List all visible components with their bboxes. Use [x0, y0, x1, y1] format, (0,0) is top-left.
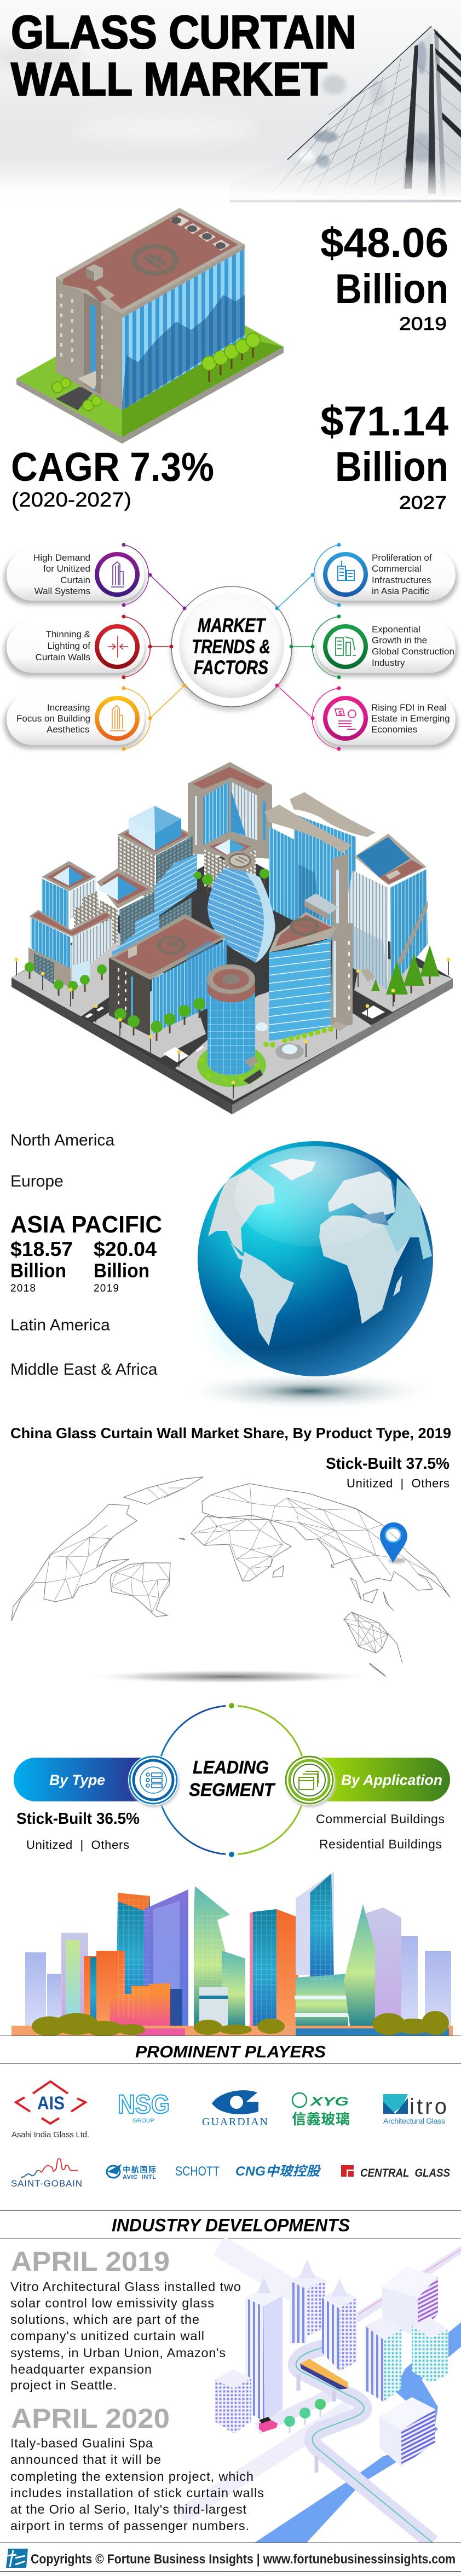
regional list: Latin America — [10, 1316, 110, 1334]
by application pill: By Application — [341, 1772, 442, 1788]
logo: NSG: GROUP — [132, 2118, 154, 2124]
logo: Vitro — [383, 2094, 447, 2125]
factor: exponential growth: Global Construction — [372, 647, 454, 656]
central circle: FACTORS — [194, 657, 268, 678]
mid glass building — [97, 868, 159, 968]
application breakdown — [316, 1812, 445, 1851]
market size 2019 — [320, 220, 448, 334]
asia pacific stats — [10, 1211, 162, 1294]
asia pacific stats: $20.04 — [94, 1238, 157, 1260]
leading segment label: SEGMENT — [189, 1780, 276, 1800]
asia pacific stats: 2019 — [94, 1283, 119, 1294]
development: April 2020: completing the extension project, which — [10, 2469, 253, 2484]
logo: AIS: Asahi India Glass Ltd. — [11, 2130, 89, 2139]
market size 2027: Billion — [335, 444, 448, 490]
front right curved tower — [269, 893, 353, 1041]
development: April 2019: Vitro Architectural Glass installed two — [10, 2280, 241, 2294]
factor: proliferation — [275, 543, 458, 610]
title: WALL MARKET — [11, 54, 327, 106]
factor: aesthetics: Focus on Building — [16, 713, 90, 724]
map shadow — [84, 1670, 374, 1684]
illustration: isometric city — [11, 762, 453, 1114]
regional list — [10, 1131, 162, 1379]
logo: XYG: XYG — [309, 2095, 349, 2108]
footer — [0, 2543, 461, 2571]
development: April 2019: company's unitized curtain wall — [10, 2329, 204, 2343]
by application pill — [284, 1755, 450, 1807]
icon: fortune business insights logo — [6, 2549, 28, 2568]
panel: leading segment — [14, 1701, 450, 1859]
development: April 2020: announced that it will be — [10, 2452, 161, 2467]
logo: NSG: NSG — [118, 2090, 170, 2119]
front left helipad building — [109, 914, 227, 1036]
illustration: isometric helipad building — [16, 208, 284, 444]
logo: Saint-Gobain — [11, 2159, 82, 2189]
heading: prominent players: PROMINENT PLAYERS — [135, 2042, 326, 2061]
leading segment label — [189, 1757, 276, 1800]
egg tower — [208, 851, 275, 963]
development: April 2020: APRIL 2020 — [11, 2403, 170, 2434]
CAGR: CAGR 7.3% — [11, 444, 214, 490]
asia pacific stats: ASIA PACIFIC — [10, 1211, 162, 1238]
application breakdown: Commercial Buildings — [316, 1812, 445, 1826]
factor: exponential growth: Industry — [372, 658, 405, 668]
trees, lamps and fountains — [14, 869, 450, 1098]
panel: market trends and factors — [4, 543, 458, 751]
logo: Schott: SCHOTT — [175, 2164, 220, 2179]
factor: aesthetics: Increasing — [47, 702, 90, 713]
segment ring — [157, 1701, 306, 1859]
logo: Vitro: Architectural Glass — [383, 2116, 445, 2125]
map pin — [380, 1522, 407, 1563]
asia pacific stats: 2018 — [10, 1283, 36, 1294]
map outlines — [11, 1504, 137, 1621]
regional list: Europe — [10, 1172, 64, 1190]
curved tower front — [264, 805, 351, 941]
factor: high demand — [4, 543, 186, 610]
left building with platform — [28, 861, 112, 988]
development: April 2019: solutions, which are part of the — [10, 2312, 199, 2327]
round tower — [197, 964, 266, 1087]
development: April 2020 — [10, 2403, 264, 2533]
development: April 2020: includes installation of stick curtain walls — [10, 2486, 264, 2500]
factor: rising FDI: $ — [338, 710, 342, 717]
factor: high demand: Curtain — [60, 575, 90, 585]
regional list: North America — [10, 1131, 114, 1149]
factor: rising FDI: Rising FDI in Real — [371, 702, 446, 713]
logo: AVIC — [107, 2164, 156, 2180]
development: April 2019: headquarter expansion — [10, 2362, 152, 2376]
development: April 2020: at the Orio al Serio, Italy's third-largest — [10, 2502, 246, 2516]
development: April 2019: APRIL 2019 — [11, 2246, 170, 2277]
market size 2027: 2027 — [399, 492, 447, 513]
factor: rising FDI: Estate in Emerging — [371, 713, 450, 724]
factor: rising FDI — [275, 684, 458, 751]
world wireframe map — [11, 1477, 450, 1677]
factor: thinning: Curtain Walls — [36, 652, 90, 662]
logo: XYG — [292, 2093, 350, 2127]
factor: thinning: Lighting of — [48, 641, 90, 651]
curved tower rear — [290, 792, 376, 903]
factor: proliferation: Proliferation of — [372, 553, 432, 563]
logo: AVIC: AVIC INTL — [123, 2174, 156, 2180]
development: April 2019: systems, in Urban Union, Amazon's — [10, 2346, 226, 2360]
factor: exponential growth: Growth in the — [372, 635, 427, 646]
regional list: Middle East & Africa — [10, 1360, 158, 1379]
CAGR — [11, 444, 214, 511]
type breakdown: Stick-Built 36.5% — [16, 1810, 140, 1828]
central circle: TRENDS & — [192, 636, 270, 658]
development: April 2020: Italy-based Gualini Spa — [10, 2436, 153, 2450]
logo: Central Glass: CENTRAL GLASS — [360, 2167, 450, 2179]
right tower with solar roof — [348, 834, 428, 990]
logo: XYG: 信義玻璃 — [292, 2111, 350, 2127]
asia pacific stats: Billion — [10, 1259, 66, 1282]
map mesh lines — [32, 1484, 435, 1653]
back tall tower — [188, 762, 272, 897]
factor: proliferation: Commercial — [372, 563, 422, 574]
logo: AVIC: 中航国际 — [123, 2165, 156, 2174]
logo: AIS — [11, 2081, 89, 2139]
development: April 2019: project in Seattle. — [10, 2378, 117, 2392]
by type pill: By Type — [49, 1772, 105, 1788]
factor: thinning — [4, 615, 173, 679]
illustration: futuristic city — [181, 2246, 461, 2543]
central circle: MARKET — [198, 615, 266, 636]
heading: prominent players — [0, 2036, 461, 2063]
stick-built share: Stick-Built 37.5% — [326, 1455, 450, 1473]
market size 2019: $48.06 — [320, 220, 448, 266]
market size 2019: Billion — [335, 266, 448, 312]
globe — [198, 1141, 433, 1406]
ground plate — [11, 850, 453, 1114]
market size 2027: $71.14 — [320, 398, 448, 445]
logo: CNG: CNG中玻控股 — [235, 2164, 321, 2179]
leading segment label: LEADING — [193, 1757, 269, 1777]
factor: high demand: for Unitized — [43, 563, 90, 574]
logo: Guardian — [202, 2090, 268, 2128]
factor: exponential growth: Exponential — [372, 624, 420, 635]
application breakdown: Residential Buildings — [319, 1837, 442, 1851]
pyramid building — [117, 806, 197, 952]
heading: industry developments — [0, 2210, 461, 2238]
factor: aesthetics: Aesthetics — [47, 724, 89, 735]
factor: high demand: Wall Systems — [34, 586, 90, 596]
factor: rising FDI: Economies — [371, 724, 417, 735]
connector lines — [124, 545, 339, 749]
factor: high demand: High Demand — [33, 553, 90, 563]
type breakdown — [16, 1810, 140, 1852]
by type pill — [14, 1755, 180, 1807]
factor: aesthetics — [4, 684, 186, 751]
development: April 2020: airport in terms of passenger numbers. — [10, 2519, 249, 2533]
factor: proliferation: Infrastructures — [372, 575, 431, 585]
header background: sky and glass tower — [0, 0, 461, 202]
development: April 2019 — [10, 2246, 241, 2392]
logo: Central Glass — [341, 2165, 450, 2179]
stick-built share — [326, 1455, 450, 1490]
title — [11, 7, 356, 106]
chart title: china share: China Glass Curtain Wall Market Share, By Product Type, 2019 — [10, 1425, 451, 1441]
market size 2019: 2019 — [399, 313, 447, 334]
CAGR: (2020-2027) — [11, 489, 131, 511]
heading: industry developments: INDUSTRY DEVELOPMENTS — [112, 2215, 350, 2235]
factor: exponential growth — [289, 615, 458, 679]
asia pacific stats: $18.57 — [10, 1238, 73, 1260]
factor: proliferation: in Asia Pacific — [372, 586, 429, 596]
stick-built share: Unitized | Others — [347, 1476, 450, 1490]
type breakdown: Unitized | Others — [26, 1838, 129, 1852]
title: GLASS CURTAIN — [11, 7, 356, 59]
logo: Vitro: itro — [410, 2095, 447, 2119]
asia pacific stats: Billion — [94, 1259, 149, 1282]
factor: thinning: Thinning & — [46, 629, 91, 639]
development: April 2019: solar control low emissivity glass — [10, 2296, 214, 2310]
central circle — [170, 586, 293, 711]
logo: AIS: AIS — [37, 2093, 65, 2114]
logo: Guardian: GUARDIAN — [202, 2116, 268, 2128]
logo: Saint-Gobain: SAINT-GOBAIN — [11, 2178, 82, 2189]
illustration: colourful skyline — [11, 1871, 453, 2036]
market size 2027 — [320, 398, 448, 513]
